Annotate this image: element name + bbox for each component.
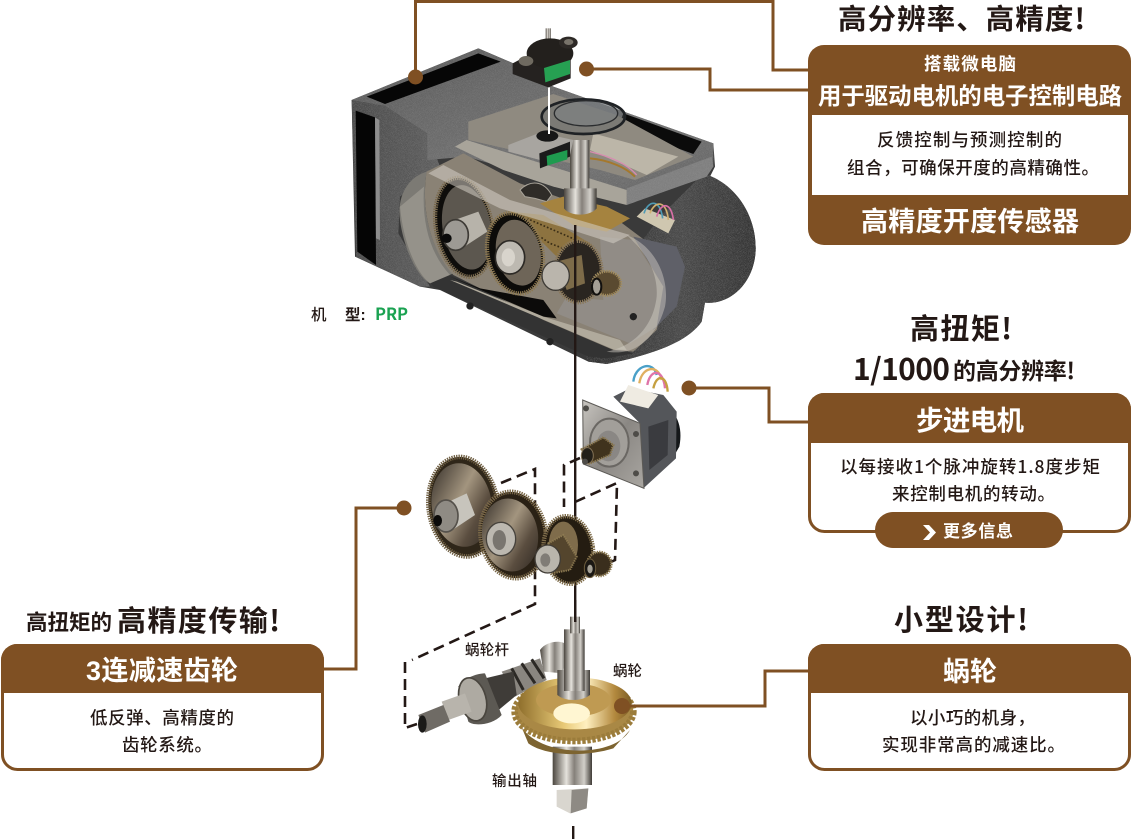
shaft tip bore [418,715,427,733]
motor body [613,388,677,488]
drive pinion end [584,559,596,578]
gear web [490,215,547,290]
sensor ear right [559,37,578,49]
detached sensor [513,28,578,87]
dashed assembly lines [405,458,617,728]
shaft top [570,617,580,633]
marker dot: worm wheel [614,698,630,714]
gear 3 pinion [548,535,577,573]
panel footer heading: 高精度开度传感器 [861,206,1079,237]
hub [450,212,487,248]
connector wires [644,203,663,218]
wire yellow [653,378,668,392]
panel background [808,45,1131,245]
housing left face [352,100,440,287]
heading: compact: 小型设计! [894,597,1028,639]
photo: stepping motor [581,366,680,488]
gear teeth [428,173,500,281]
connector [637,208,675,233]
axis top of worm shaft [574,600,576,622]
rear motor cap [660,402,680,460]
panel sub heading: 搭载微电脑 [924,54,1016,74]
panel: sensor and circuit [808,45,1131,245]
worm spiral [502,658,547,697]
gear 1 hub [438,493,475,532]
black slit [450,277,557,318]
cover right edge [607,235,666,352]
resolution text: 的高分辨率! [953,352,1075,386]
sensor hole right [564,39,573,45]
sensor cap [527,38,573,68]
highlight [553,703,590,723]
panel: worm gear [808,644,1131,770]
rear opening [367,53,501,104]
gear 3 web [549,522,578,568]
gear 3 teeth [539,513,597,587]
panel header [808,644,1131,693]
pinion teeth [557,255,585,290]
dashes: worm [405,662,417,728]
body silhouette [352,48,756,364]
side rib [375,117,380,240]
cutaway: gears behind clear cover [399,153,685,358]
drive pinion teeth [587,552,611,576]
rear bearing of worm [540,642,567,673]
panel: gears [1,644,324,770]
white guide line [548,87,550,134]
marker dot: housing [408,70,423,84]
output shaft square [557,788,588,813]
flange [583,400,644,488]
brass helical teeth [517,214,593,260]
body line 1: 低反弹、高精度的 [90,708,234,728]
shaft mid step [564,629,585,691]
marker dot: motor [682,380,696,396]
button: more info [875,512,1063,548]
brass boss [536,683,611,717]
flange boss [590,419,629,467]
square shade [571,788,588,813]
cover screws [470,306,633,342]
body line 1: 以小巧的机身， [910,708,1035,728]
motor dark panel [648,420,668,470]
label: worm wheel: 蜗轮 [613,663,642,680]
wire blue [633,366,657,382]
body line 2: 齿轮系统。 [122,735,212,755]
drive pinion core [587,565,593,573]
brass under skirt [520,723,630,754]
photo: assembled actuator [352,48,756,364]
gear 1 teeth [422,452,505,561]
boss center [596,431,620,461]
shaft lower step [557,670,590,700]
body line 1: 反馈控制与预测控制的 [877,130,1062,150]
heading: high torque: 高扭矩! [910,306,1012,348]
gear 2 [475,488,552,582]
ring [542,99,625,134]
third gear [542,241,602,302]
heading large part: 高精度传输! [117,598,280,640]
bore [442,234,452,243]
motor cylinder housing [573,173,756,364]
panel heading: 蜗轮 [943,657,997,687]
second gear [480,208,550,299]
lower output shaft [553,747,592,785]
gear 2 web [477,495,543,575]
backing plate [425,153,667,352]
left lens highlight [400,187,450,283]
green label lower [547,150,567,166]
panel heading: 步进电机 [916,405,1024,436]
leader: top housing to panel [416,2,808,75]
motor block seen through cover [633,237,685,330]
wiring [590,152,637,175]
tray light plate [590,133,678,175]
chevron icon [923,525,936,540]
gear 3 [535,513,597,587]
lower axis continuation [572,826,574,839]
tray front lip [627,157,713,205]
model name: PRP [375,301,408,325]
bearing [443,220,468,250]
left clear lens [399,172,453,283]
worm [520,183,552,202]
marker dot: gears [396,500,412,516]
shaft tip section [442,693,472,720]
worm shaft dark section [485,672,517,712]
heading: gear precision [26,598,280,640]
connector wires tan [650,204,668,220]
panel header [808,393,1131,443]
brass gear band [510,212,600,280]
motor pinion [582,437,613,464]
sensor pin [546,28,551,53]
tray inner [468,94,693,180]
brass wheel body [518,677,632,729]
large gear [428,173,500,281]
heading: resolution figure [853,345,1075,389]
connector wires pink [657,206,673,220]
gear 2 teeth [475,488,552,582]
model label text: 机 [311,306,327,324]
white connector [620,385,658,408]
body line 2: 实现非常高的减速比。 [882,735,1065,755]
gear 3 center [540,553,550,567]
gear web [436,181,498,274]
gear 1 bore [433,515,442,526]
silver lower band [450,280,627,350]
panel frame [2,646,322,770]
worm shaft bearing [458,673,502,724]
body line 1: 以每接收1个脉冲旋转1.8度步矩 [840,454,1100,479]
left face opening [356,111,376,265]
wire tan [639,369,662,383]
flange bolts [585,408,636,473]
sensor block front [539,142,570,168]
bearing face [454,675,491,724]
body line 2: 来控制电机的转动。 [892,484,1055,504]
panel heading: 用于驱动电机的电子控制电路 [818,83,1123,109]
model label [311,301,408,325]
gear 1 bearing [434,500,458,532]
gear 2 bearing [486,522,516,556]
output shaft [570,140,589,212]
button label: 更多信息 [943,521,1013,541]
gear teeth [555,241,602,302]
brass wheel teeth [515,682,633,741]
panel heading: 3连减速齿轮 [86,656,238,686]
shaft tip [418,705,450,733]
panel: stepping motor [808,393,1131,548]
body line 2: 组合，可确保开度的高精确性。 [847,158,1099,178]
bearing [495,241,525,274]
gear teeth [480,208,550,299]
small pinion [593,271,621,295]
sensor base block [508,133,573,160]
pinion end [592,279,601,295]
leader: worm wheel [622,671,808,706]
photo: top parts of actuator [508,28,675,233]
gear 1 [422,452,505,561]
wire pink [647,373,665,388]
sensor green label [544,60,570,82]
drive pinion [584,552,611,578]
model label text second: 型: [345,306,366,324]
leader: gears [323,508,404,669]
marker dot: sensor [579,62,594,76]
gear 1 web [426,459,497,551]
resolution number: 1/1000 [853,345,950,389]
motor plate through cover [557,237,663,343]
photo: 3-stage reduction gears [422,452,611,587]
shaft collar [564,188,597,215]
sensor hole left [519,56,533,66]
dashes: motor [564,458,580,507]
clear band highlight [428,165,630,243]
worm wheel brass [540,197,630,232]
photo: worm and worm wheel [418,617,633,813]
panel frame [810,394,1130,532]
pinion end [581,448,593,464]
part labels [465,642,642,790]
label: output shaft: 输出轴 [492,773,537,790]
leader: motor [689,388,808,422]
gear 2 center [493,530,506,550]
panel frame [810,646,1130,770]
sensor base [513,55,571,87]
worm threads [512,659,544,690]
housing top face [352,48,713,203]
label: worm: 蜗轮杆 [465,642,510,659]
sensor well [536,130,558,142]
connector wires [633,366,668,392]
right tray slot [618,113,702,154]
panel header [1,644,324,693]
leader: sensor to panel [586,69,808,90]
dashes: gears [412,469,535,660]
dashes: motor lower [575,483,617,562]
vertical assembly axis line [574,225,576,620]
button background [875,512,1063,548]
bearing core [502,248,515,266]
gear 3 bearing [535,545,560,573]
heading small part: 高扭矩的 [26,606,112,637]
lower body band [430,275,633,358]
ring inner [554,101,618,126]
frame bar [455,140,627,205]
panel body [812,115,1128,195]
third bearing [542,261,569,290]
wiring yellow [590,158,635,177]
